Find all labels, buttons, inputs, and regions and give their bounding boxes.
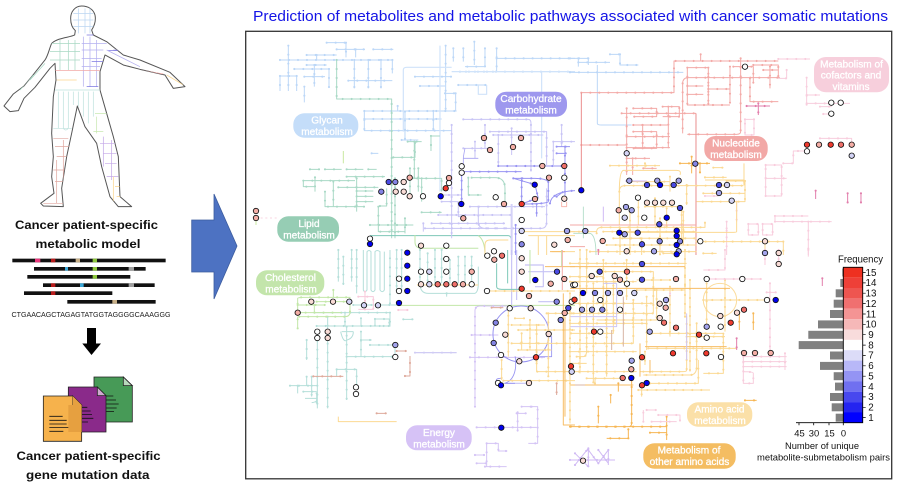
legend: frequency colour bar and histogram: 15	[824, 428, 835, 438]
label: lipid metabolism: Lipid	[298, 219, 320, 230]
legend: frequency colour bar and histogram: metabolite-submetabolism pairs	[757, 452, 890, 462]
label: glycan metabolism: metabolism	[301, 127, 353, 138]
text: model caption	[15, 218, 158, 251]
text: mutation data caption	[16, 449, 161, 482]
histogram bars	[799, 268, 843, 422]
icon: human body metabolic model	[4, 6, 185, 207]
label: other amino acids	[643, 443, 736, 469]
label: amino acid metabolism: metabolism	[694, 416, 746, 427]
label: other amino acids: other amino acids	[650, 457, 729, 468]
label: lipid metabolism	[277, 216, 339, 242]
frequency scale labels: 13	[866, 288, 877, 300]
arrow: down	[82, 328, 101, 355]
legend: frequency colour bar and histogram: 0	[841, 428, 846, 438]
frequency scale labels: 5	[868, 372, 874, 382]
label: carbohydrate metabolism: metabolism	[505, 106, 557, 116]
label: cholesterol metabolism	[256, 270, 324, 296]
frequency scale labels: 11	[866, 309, 876, 320]
frequency scale labels: 6	[868, 361, 874, 372]
frequency scale labels: 4	[868, 382, 874, 393]
text: DNA sequence: CTGAACAGCTAGAGTATGGTAGGGGCAAAGGG	[12, 310, 171, 319]
frequency scale labels: 10	[866, 320, 877, 331]
metabolic network: pathway lines	[256, 42, 861, 467]
label: cofactors and vitamins	[814, 57, 889, 93]
frequency scale labels: 12	[866, 299, 876, 310]
text: mutation data caption: gene mutation data	[26, 468, 150, 482]
frequency scale labels: 15	[866, 268, 877, 279]
text: mutation data caption: Cancer patient-specific	[16, 449, 161, 463]
label: amino acid metabolism: Amino acid	[695, 404, 744, 416]
label: energy metabolism	[406, 425, 472, 450]
frequency scale labels: 8	[868, 340, 874, 351]
label: glycan metabolism: Glycan	[311, 116, 343, 126]
label: energy metabolism: metabolism	[413, 440, 465, 450]
frequency scale labels: 14	[866, 278, 877, 289]
legend: frequency colour bar and histogram	[757, 254, 890, 462]
frequency scale labels: 2	[868, 403, 874, 414]
label: energy metabolism: Energy	[423, 428, 456, 439]
label: cofactors and vitamins: Metabolism of	[820, 60, 883, 70]
histogram axis	[796, 423, 843, 425]
frequency scale labels: 9	[868, 330, 874, 341]
title: Prediction of metabolites and metabolic pathways associated with cancer somatic mutations	[253, 9, 888, 25]
graphic: sequencing reads	[12, 259, 166, 304]
label: lipid metabolism: metabolism	[283, 230, 335, 242]
panel: metabolic map frame	[246, 31, 892, 479]
category labels	[256, 57, 889, 469]
frequency scale labels: Frequency	[838, 254, 883, 266]
label: amino acid metabolism	[687, 402, 752, 427]
legend: frequency colour bar and histogram: 30	[809, 428, 819, 438]
label: cofactors and vitamins: cofactors and	[821, 70, 881, 82]
frequency scale labels: 7	[868, 351, 874, 362]
icon: mutation data documents	[43, 377, 132, 441]
label: nucleotide metabolism: Nucleotide	[712, 138, 760, 150]
label: glycan metabolism	[293, 113, 358, 138]
mutation-associated metabolites	[253, 64, 854, 463]
frequency scale labels	[838, 254, 883, 424]
label: other amino acids: Metabolism of	[658, 446, 721, 456]
label: carbohydrate metabolism	[495, 92, 567, 117]
label: cholesterol metabolism: Cholesterol	[265, 273, 316, 284]
label: carbohydrate metabolism: Carbohydrate	[500, 94, 562, 105]
legend: frequency colour bar and histogram: 45	[794, 428, 805, 438]
frequency scale labels: 3	[868, 392, 874, 403]
label: cholesterol metabolism: metabolism	[265, 284, 317, 296]
text: model caption: metabolic model	[36, 237, 140, 251]
frequency scale labels: 1	[868, 413, 874, 424]
label: nucleotide metabolism	[704, 136, 768, 161]
legend: frequency colour bar and histogram: Number of unique	[785, 440, 859, 451]
label: cofactors and vitamins: vitamins	[832, 82, 870, 93]
label: nucleotide metabolism: metabolism	[710, 150, 762, 161]
arrow: model to map	[192, 194, 237, 299]
text: model caption: Cancer patient-specific	[15, 218, 158, 232]
colour bar	[843, 267, 863, 423]
